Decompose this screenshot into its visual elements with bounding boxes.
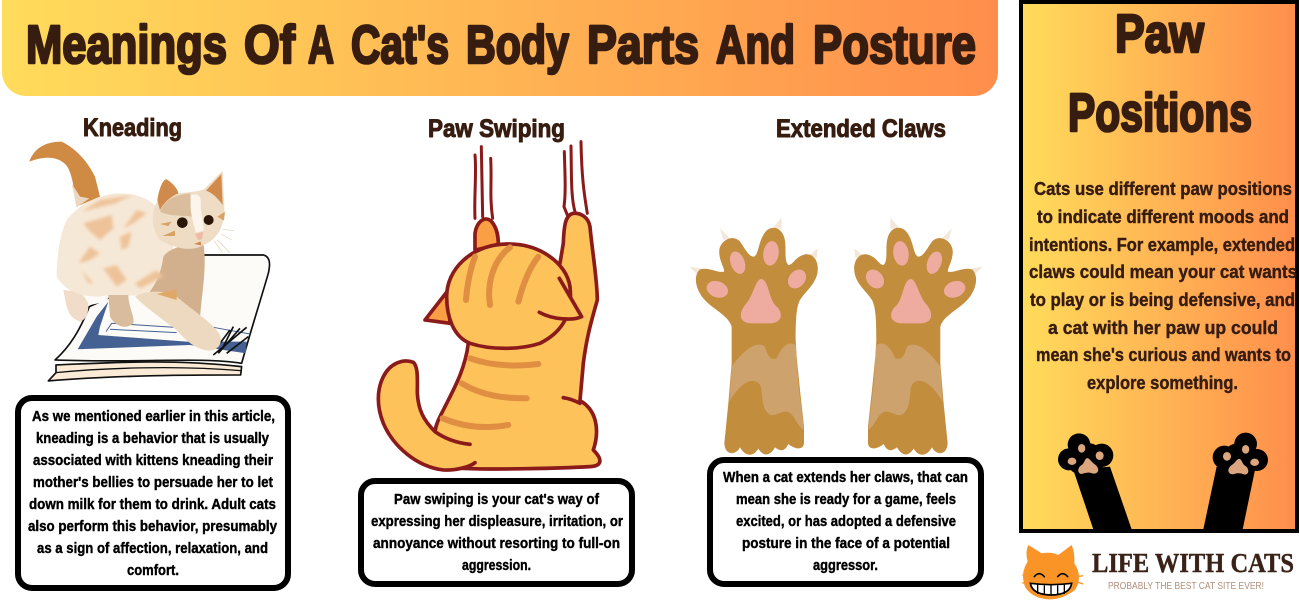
title text: Parts	[587, 15, 699, 75]
panel heading	[1068, 4, 1252, 143]
text box: paw swiping: aggression.	[462, 558, 531, 574]
text box: kneading: As we mentioned earlier in this article,	[32, 409, 275, 425]
illustration: kitten kneading on a blanket	[29, 142, 270, 381]
cat body and raised arm	[435, 213, 600, 469]
kitten tail	[29, 142, 100, 207]
blanket	[48, 255, 270, 381]
heading: Kneading: Kneading	[83, 114, 182, 142]
text box: extended claws	[710, 460, 981, 584]
cat raised back paw	[475, 219, 498, 250]
text box: paw swiping	[361, 481, 632, 584]
head stripes	[466, 247, 538, 305]
panel heading: Paw	[1115, 4, 1205, 64]
title text: Meanings	[26, 15, 227, 75]
text box: kneading: kneading is a behavior that is usually	[36, 431, 269, 447]
icon: black cat paws raised	[1058, 433, 1268, 529]
scratch marks	[475, 142, 587, 218]
text box: kneading: down milk for them to drink. Adult cats	[29, 497, 276, 513]
text box: kneading: also perform this behavior, presumably	[28, 519, 277, 535]
text box: extended claws: excited, or has adopted a defensive	[736, 514, 956, 530]
cat head	[447, 244, 570, 348]
title text: And	[716, 15, 795, 75]
text box: extended claws: When a cat extends her claws, that can	[723, 470, 968, 486]
panel: paw positions	[1021, 2, 1297, 531]
heading: Extended Claws: Extended Claws	[776, 115, 946, 143]
text box: paw swiping: annoyance without resorting to full-on	[373, 536, 620, 552]
logo: Life With Cats	[1022, 545, 1294, 599]
illustration: orange cat swiping with scratch marks	[378, 142, 600, 470]
title text: Posture	[813, 15, 976, 75]
panel body text: to indicate different moods and	[1037, 207, 1289, 227]
text box: extended claws: posture in the face of a potential	[742, 536, 950, 552]
heading: Paw Swiping: Paw Swiping	[428, 115, 565, 143]
icon: grinning cat	[1022, 545, 1083, 599]
panel body text: explore something.	[1087, 373, 1238, 393]
panel body text	[1029, 179, 1297, 393]
text box: kneading: mother's bellies to persuade her to let	[33, 475, 273, 491]
kitten head	[153, 171, 224, 249]
text box: kneading: as a sign of affection, relaxation, and	[37, 541, 268, 557]
cat right ear	[539, 278, 582, 319]
cat left ear	[425, 290, 450, 323]
text box: extended claws: aggressor.	[813, 558, 878, 574]
illustration: left paw with extended claws	[689, 217, 818, 455]
title text: Body	[466, 15, 569, 75]
illustration: right paw with extended claws	[854, 217, 983, 455]
title text	[26, 15, 976, 75]
title text: Cat's	[351, 15, 449, 75]
text box: kneading	[18, 398, 288, 588]
title banner	[2, 0, 998, 96]
text box: paw swiping: expressing her displeasure, irritation, or	[371, 514, 623, 530]
logo tagline: PROBABLY THE BEST CAT SITE EVER!	[1108, 581, 1264, 592]
title text: Of	[244, 15, 296, 75]
text box: kneading: comfort.	[127, 563, 179, 579]
panel body text: a cat with her paw up could	[1048, 318, 1278, 338]
text box: kneading: associated with kittens kneading their	[33, 453, 273, 469]
text box: extended claws: mean she is ready for a game, feels	[736, 492, 956, 508]
body stripes	[443, 358, 538, 427]
kitten body	[57, 193, 173, 297]
text box: paw swiping: Paw swiping is your cat's way of	[394, 492, 599, 508]
cat tail	[378, 361, 580, 470]
title text: A	[308, 15, 334, 75]
